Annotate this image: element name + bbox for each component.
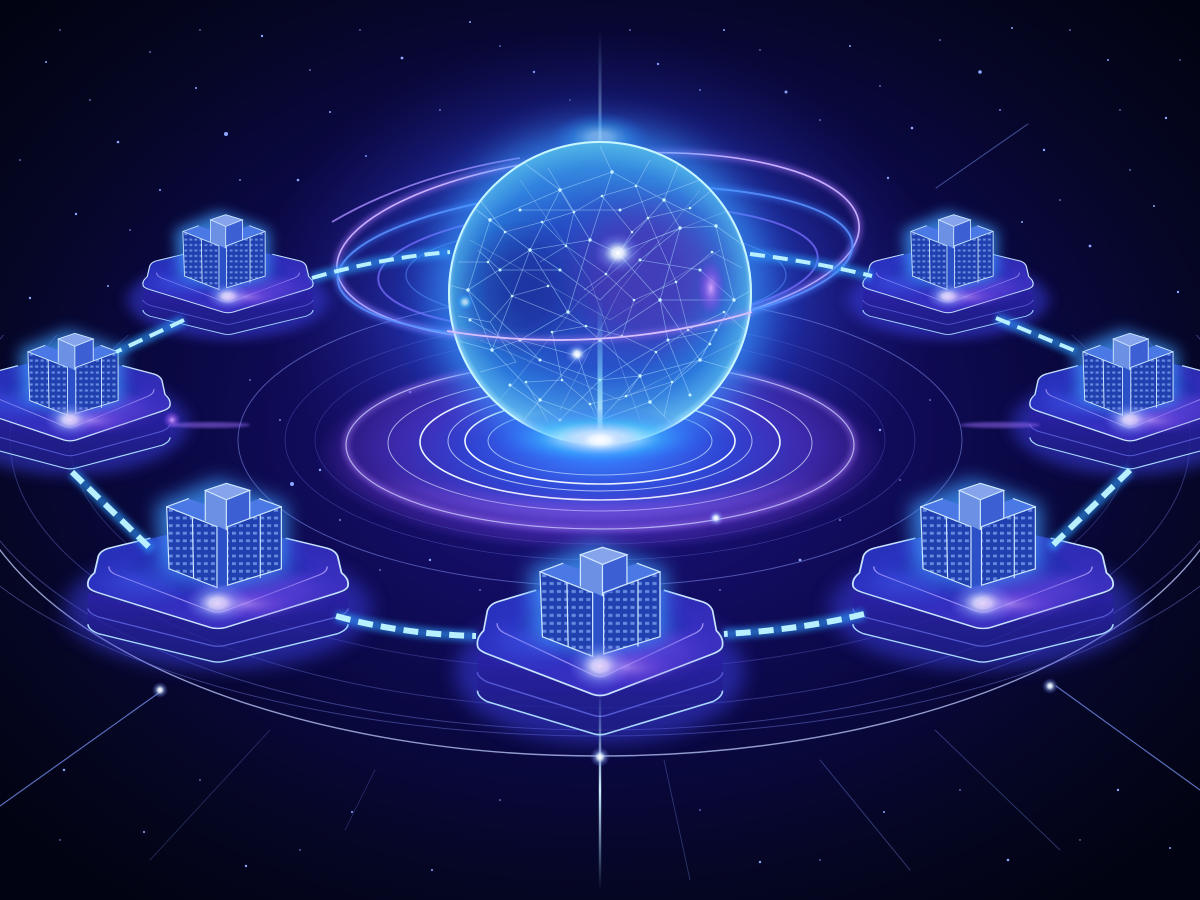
node: left data center [0,330,188,475]
network nodes [466,170,736,422]
bright sparks inside sphere [594,233,642,273]
lower vertical beam inside sphere [598,300,602,440]
node: right data center [1012,330,1200,475]
orbit rings behind sphere [329,133,867,361]
chain links between nodes [72,252,1130,636]
sphere: glowing network globe [434,127,766,459]
chain glow layer [72,252,1130,636]
node: front center data center [455,542,745,743]
node: top left data center [128,211,328,339]
sphere base flare [490,408,710,468]
purple ring glow at floor front [370,480,830,520]
chain dashes [72,252,1130,636]
floor glow under sphere [315,357,885,553]
node: lower left data center [65,479,371,669]
dense short mesh segments [458,160,745,436]
sphere aura [260,30,940,550]
concentric floor rings [0,307,1200,757]
sphere rim [449,142,751,444]
node: lower right data center [830,479,1136,669]
orbit ring front arc over sphere [447,312,752,340]
lens flare: bottom center star [590,690,610,890]
outer rings: lower half only [0,335,1200,757]
node: top right data center [848,211,1048,339]
vertical light beam and top flare [550,30,650,450]
lens flare: side sparkles [152,411,1058,698]
network mesh lines [448,146,752,436]
